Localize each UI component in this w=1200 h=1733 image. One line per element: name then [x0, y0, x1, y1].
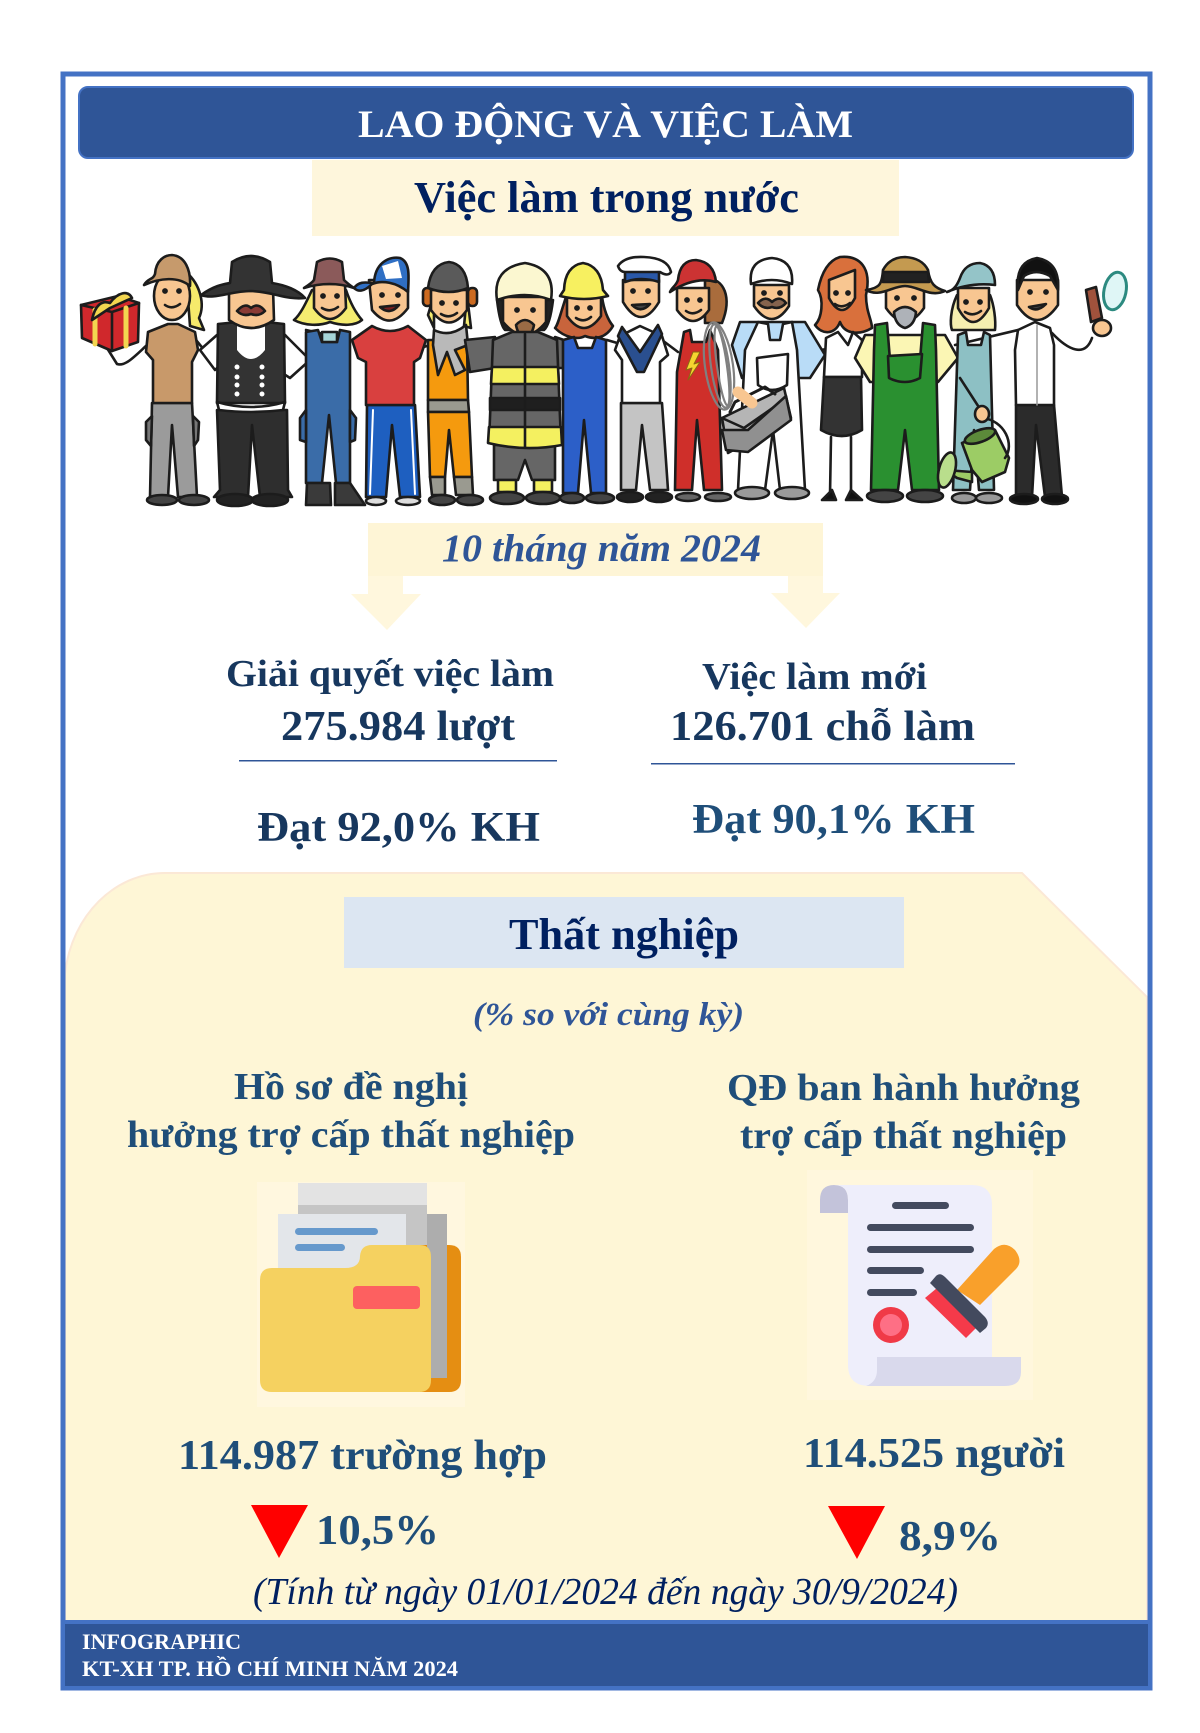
- footer: KT-XH TP. HỒ CHÍ MINH NĂM 2024: [82, 1656, 458, 1681]
- stat: jobs resolved: 275.984 lượt: [281, 704, 515, 750]
- change: decisions down: 8,9%: [899, 1514, 1001, 1560]
- figure: woman in black skirt: [815, 257, 872, 500]
- figure: electrician with rope: [670, 260, 739, 501]
- column heading: decisions: [727, 1067, 1080, 1157]
- value: applications: 114.987 trường hợp: [178, 1433, 547, 1479]
- heading: unemployment: [344, 897, 904, 968]
- figure: woman in blue overalls: [294, 258, 365, 505]
- stat: new jobs: Đạt 90,1% KH: [692, 797, 975, 843]
- icon: folder: [257, 1182, 465, 1407]
- figure: man in red shirt: [352, 258, 426, 505]
- arrows: period banner: 10 tháng năm 2024: [442, 527, 761, 570]
- change: applications down: 10,5%: [316, 1508, 439, 1554]
- title bar: [79, 87, 1133, 158]
- icon: document with stamp: [807, 1170, 1033, 1400]
- note: date range: (Tính từ ngày 01/01/2024 đến ngày 30/9/2024): [253, 1571, 958, 1613]
- stat: new jobs: [651, 656, 1015, 843]
- heading: domestic jobs: [312, 160, 899, 236]
- change: decisions down: [828, 1506, 1001, 1560]
- heading: domestic jobs: Việc làm trong nước: [414, 173, 799, 222]
- column heading: decisions: QĐ ban hành hưởng: [727, 1067, 1080, 1109]
- stat: new jobs: Việc làm mới: [702, 656, 927, 698]
- figure: man in black hat: [200, 256, 310, 506]
- arms behind the figures: [107, 330, 1092, 372]
- column heading: applications: [127, 1066, 575, 1156]
- figure: woman with watering can: [947, 263, 1002, 503]
- column heading: decisions: trợ cấp thất nghiệp: [740, 1115, 1067, 1157]
- footer: [63, 1622, 1150, 1688]
- icon: gift box: [81, 293, 139, 351]
- icon: toolbox: [722, 387, 791, 453]
- change: applications down: [251, 1505, 439, 1558]
- footer: INFOGRAPHIC: [82, 1629, 241, 1654]
- stat: jobs resolved: Giải quyết việc làm: [226, 653, 554, 695]
- figure: sailor: [615, 257, 672, 502]
- stat: jobs resolved: [226, 653, 557, 851]
- value: decisions: 114.525 người: [803, 1431, 1065, 1477]
- column heading: applications: hưởng trợ cấp thất nghiệp: [127, 1114, 575, 1156]
- note: compared with same period: (% so với cùng kỳ): [473, 997, 744, 1033]
- figure: worker in orange vest: [423, 262, 483, 505]
- figure: man with gift: [144, 255, 209, 505]
- title bar: LAO ĐỘNG VÀ VIỆC LÀM: [358, 101, 853, 146]
- stat: new jobs: 126.701 chỗ làm: [670, 704, 975, 750]
- column heading: applications: Hồ sơ đề nghị: [234, 1066, 468, 1108]
- figure: man with mirror and comb: [1010, 258, 1130, 504]
- icon: watering can: [935, 406, 1009, 489]
- figure: firefighter: [465, 263, 570, 504]
- figure: painter in white overalls: [732, 258, 825, 499]
- figure: woman with yellow helmet: [555, 263, 614, 503]
- panel: unemployment background: [65, 873, 1147, 1622]
- illustration: row of workers: [81, 255, 1130, 506]
- stat: jobs resolved: Đạt 92,0% KH: [257, 805, 540, 851]
- arrows: period banner: [351, 523, 840, 630]
- figure: gardener in green overalls: [855, 257, 958, 502]
- heading: unemployment: Thất nghiệp: [509, 910, 739, 959]
